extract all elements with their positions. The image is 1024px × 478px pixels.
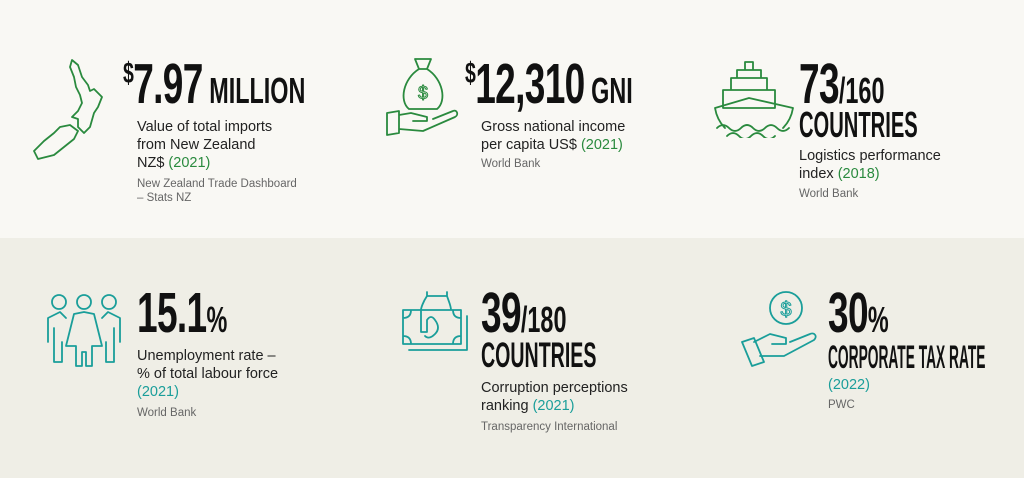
stat: imports: $7.97 MILLION bbox=[123, 52, 305, 116]
stat: logistics: 73/160 bbox=[799, 52, 884, 116]
source: imports bbox=[137, 178, 297, 204]
stat: tax: 30% bbox=[828, 281, 889, 345]
label: corruption bbox=[481, 380, 628, 414]
stat: unemployment: 15.1% bbox=[137, 281, 227, 345]
label: GNI bbox=[481, 119, 625, 153]
stat: corruption: 39/180 bbox=[481, 281, 566, 345]
icon: New Zealand map bbox=[33, 59, 103, 160]
label: tax: (2022) bbox=[828, 377, 870, 393]
source: corruption: Transparency International bbox=[481, 421, 617, 433]
label: GNI: Gross national income bbox=[481, 119, 625, 135]
label: GNI: per capita US$ (2021) bbox=[481, 137, 623, 153]
label: logistics: index (2018) bbox=[799, 166, 880, 182]
source: unemployment: World Bank bbox=[137, 407, 196, 419]
stat unit: corporate tax rate: CORPORATE TAX RATE bbox=[828, 339, 985, 375]
icon: ship bbox=[714, 61, 794, 138]
icon: money bag in hand bbox=[386, 58, 458, 136]
label: imports bbox=[137, 119, 272, 171]
label: logistics: Logistics performance bbox=[799, 148, 941, 164]
label: unemployment: % of total labour force bbox=[137, 366, 278, 382]
label: logistics bbox=[799, 148, 941, 182]
source: imports: New Zealand Trade Dashboard bbox=[137, 178, 297, 190]
label: corruption: Corruption perceptions bbox=[481, 380, 628, 396]
icon: coin in hand bbox=[741, 291, 817, 367]
label: corruption: ranking (2021) bbox=[481, 398, 575, 414]
stat unit: countries: COUNTRIES bbox=[799, 104, 918, 145]
stat: GNI: $12,310 GNI bbox=[465, 52, 633, 116]
label: unemployment bbox=[137, 348, 278, 400]
label: imports: from New Zealand bbox=[137, 137, 255, 153]
label: unemployment: Unemployment rate – bbox=[137, 348, 276, 364]
source: logistics: World Bank bbox=[799, 188, 858, 200]
source: GNI: World Bank bbox=[481, 158, 540, 170]
icon: money bribe bbox=[402, 291, 468, 351]
source: imports: – Stats NZ bbox=[137, 192, 191, 204]
icon: people bbox=[47, 294, 121, 367]
source: tax: PWC bbox=[828, 399, 855, 411]
stat unit: countries: COUNTRIES bbox=[481, 336, 596, 375]
label: imports: NZ$ (2021) bbox=[137, 155, 210, 171]
icon: money bag in hand: $ bbox=[418, 83, 428, 103]
label: unemployment: (2021) bbox=[137, 384, 179, 400]
label: imports: Value of total imports bbox=[137, 119, 272, 135]
icon: coin in hand: $ bbox=[780, 299, 792, 321]
